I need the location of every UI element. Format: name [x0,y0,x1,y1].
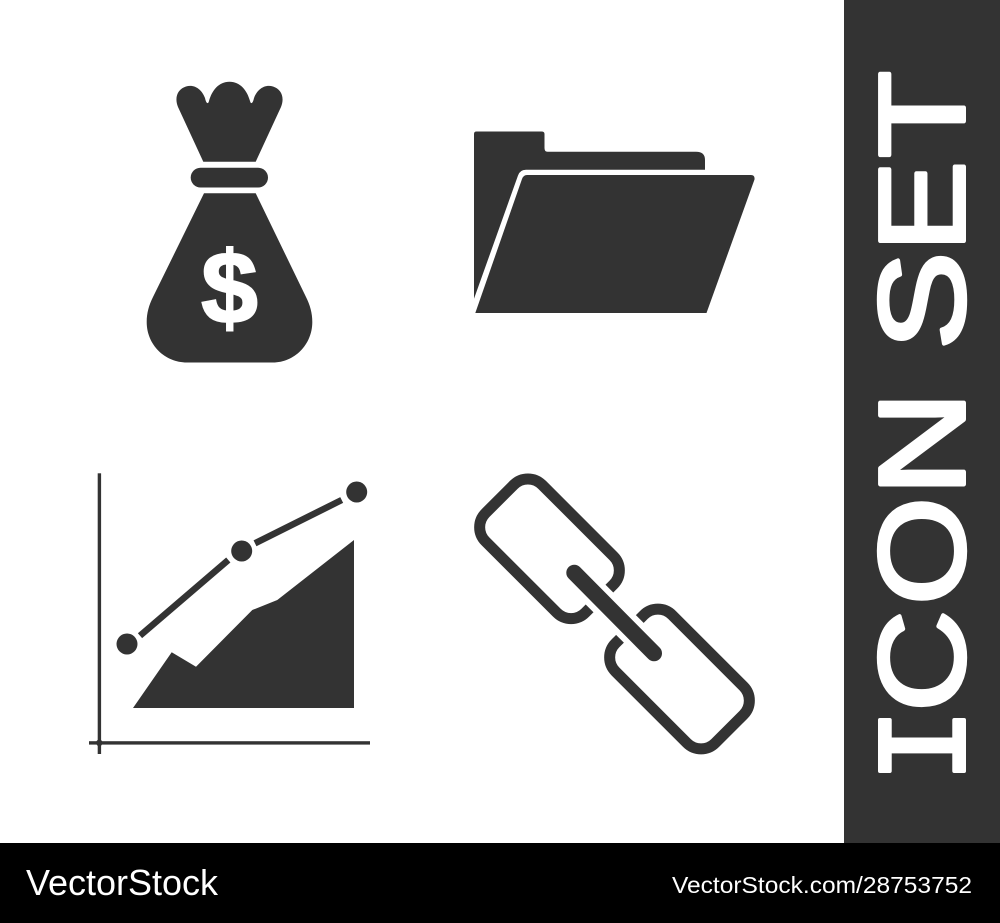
vertical title: ICON SET: E [855,161,990,252]
vertical title: ICON SET: C [854,610,990,712]
icon: line and area chart [89,473,370,754]
vertical title: ICON SET: S [853,252,990,350]
icon: chain link [471,471,758,757]
icon: folder [474,132,755,313]
area series [133,540,354,708]
chart axes [89,473,370,754]
side band [844,0,1000,843]
vertical title: ICON SET: O [854,497,990,605]
footer url: VectorStock.com/28753752 [672,872,972,898]
data points [116,482,367,654]
vertical title: ICON SET: T [855,71,991,158]
icon: money bag [147,82,312,362]
vertical title: ICON SET: I [859,707,1000,784]
line series [140,500,342,636]
dollar sign: $ [201,231,258,345]
vertical title: ICON SET [853,71,1000,784]
vertical title: ICON SET: N [855,391,990,496]
footer bar [0,843,1000,923]
footer brand: VectorStock [26,862,219,903]
